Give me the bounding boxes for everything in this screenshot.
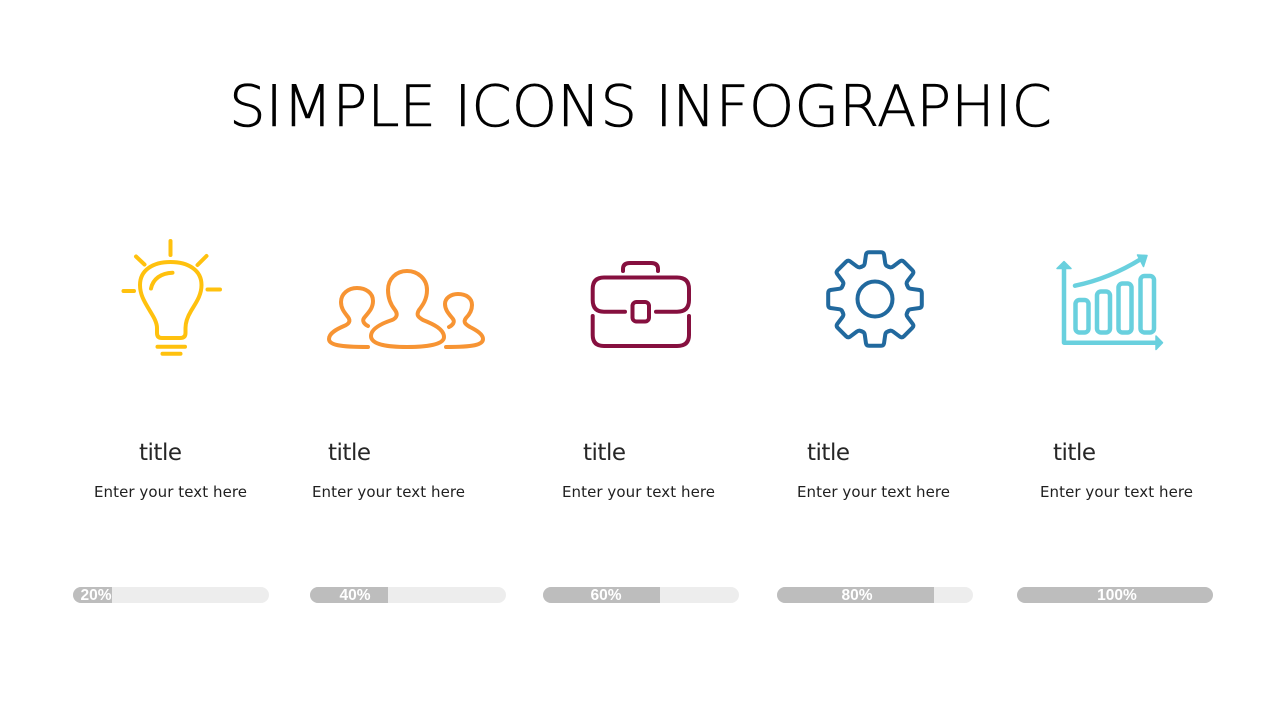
icon: people group bbox=[329, 271, 483, 347]
icon: gear bbox=[828, 252, 922, 346]
column 4 heading: title bbox=[807, 440, 850, 466]
column 2 heading: title bbox=[328, 440, 371, 466]
panel: column 3 bbox=[543, 263, 739, 604]
title: SIMPLE ICONS INFOGRAPHIC bbox=[229, 74, 1052, 140]
progress bar 20% bbox=[73, 587, 269, 604]
column 4 text: Enter your text here bbox=[797, 483, 950, 501]
progress bar 60%: 60% bbox=[590, 587, 622, 604]
progress bar 100%: 100% bbox=[1097, 587, 1137, 604]
icon: briefcase bbox=[593, 263, 689, 346]
progress bar 80% bbox=[777, 587, 973, 604]
progress bar 60% bbox=[543, 587, 739, 604]
icon: light bulb bbox=[124, 241, 220, 354]
progress bar 80%: 80% bbox=[841, 587, 873, 604]
icon: growth chart bbox=[1057, 255, 1162, 350]
column 1 text: Enter your text here bbox=[94, 483, 247, 501]
column 5 heading: title bbox=[1053, 440, 1096, 466]
panel: column 2 bbox=[310, 271, 506, 604]
panel: column 5 bbox=[1017, 255, 1213, 604]
panel: column 4 bbox=[777, 252, 973, 604]
progress bar 40% bbox=[310, 587, 506, 604]
panel: column 1 bbox=[73, 241, 269, 604]
progress bar 100% bbox=[1017, 587, 1213, 604]
progress bar 20%: 20% bbox=[80, 587, 112, 604]
column 3 text: Enter your text here bbox=[562, 483, 715, 501]
progress bar 40%: 40% bbox=[339, 587, 371, 604]
column 1 heading: title bbox=[139, 440, 182, 466]
column 2 text: Enter your text here bbox=[312, 483, 465, 501]
column 3 heading: title bbox=[583, 440, 626, 466]
column 5 text: Enter your text here bbox=[1040, 483, 1193, 501]
